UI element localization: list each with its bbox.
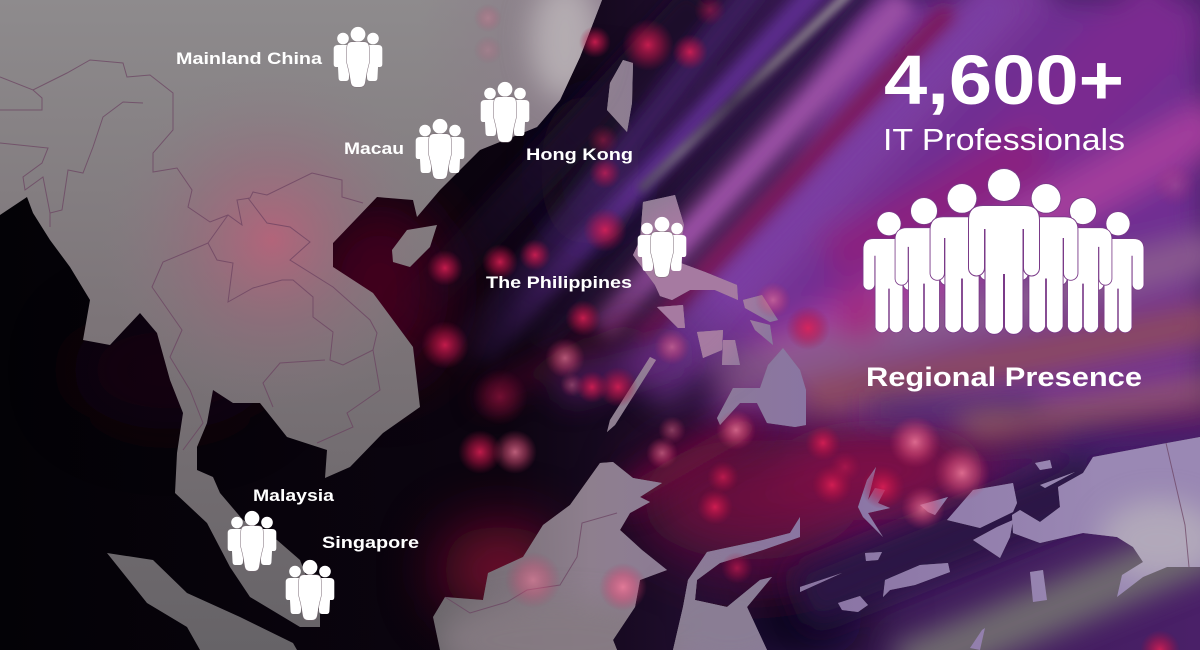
headline number: 4,600+	[884, 41, 1124, 119]
light streaks	[380, 0, 1200, 420]
label: Macau: Macau	[344, 139, 404, 158]
caption: Regional Presence: Regional Presence	[866, 362, 1142, 392]
label: Malaysia: Malaysia	[253, 486, 335, 505]
icon: Mainland China people	[334, 27, 382, 87]
icon: Malaysia people	[228, 511, 276, 571]
label: The Philippines: The Philippines	[486, 273, 632, 292]
glowing red dots	[421, 0, 1197, 650]
icon: large group of people	[863, 169, 1144, 334]
icon: Hong Kong people	[481, 82, 529, 142]
icon: Philippines people	[638, 217, 686, 277]
label: Mainland China: Mainland China	[176, 49, 323, 68]
subheading: IT Professionals	[883, 122, 1125, 157]
label: Hong Kong: Hong Kong	[526, 145, 633, 164]
lower streaks	[480, 320, 1200, 650]
icon: Singapore people	[286, 560, 334, 620]
icon: Macau people	[416, 119, 464, 179]
label: Singapore: Singapore	[322, 533, 419, 552]
